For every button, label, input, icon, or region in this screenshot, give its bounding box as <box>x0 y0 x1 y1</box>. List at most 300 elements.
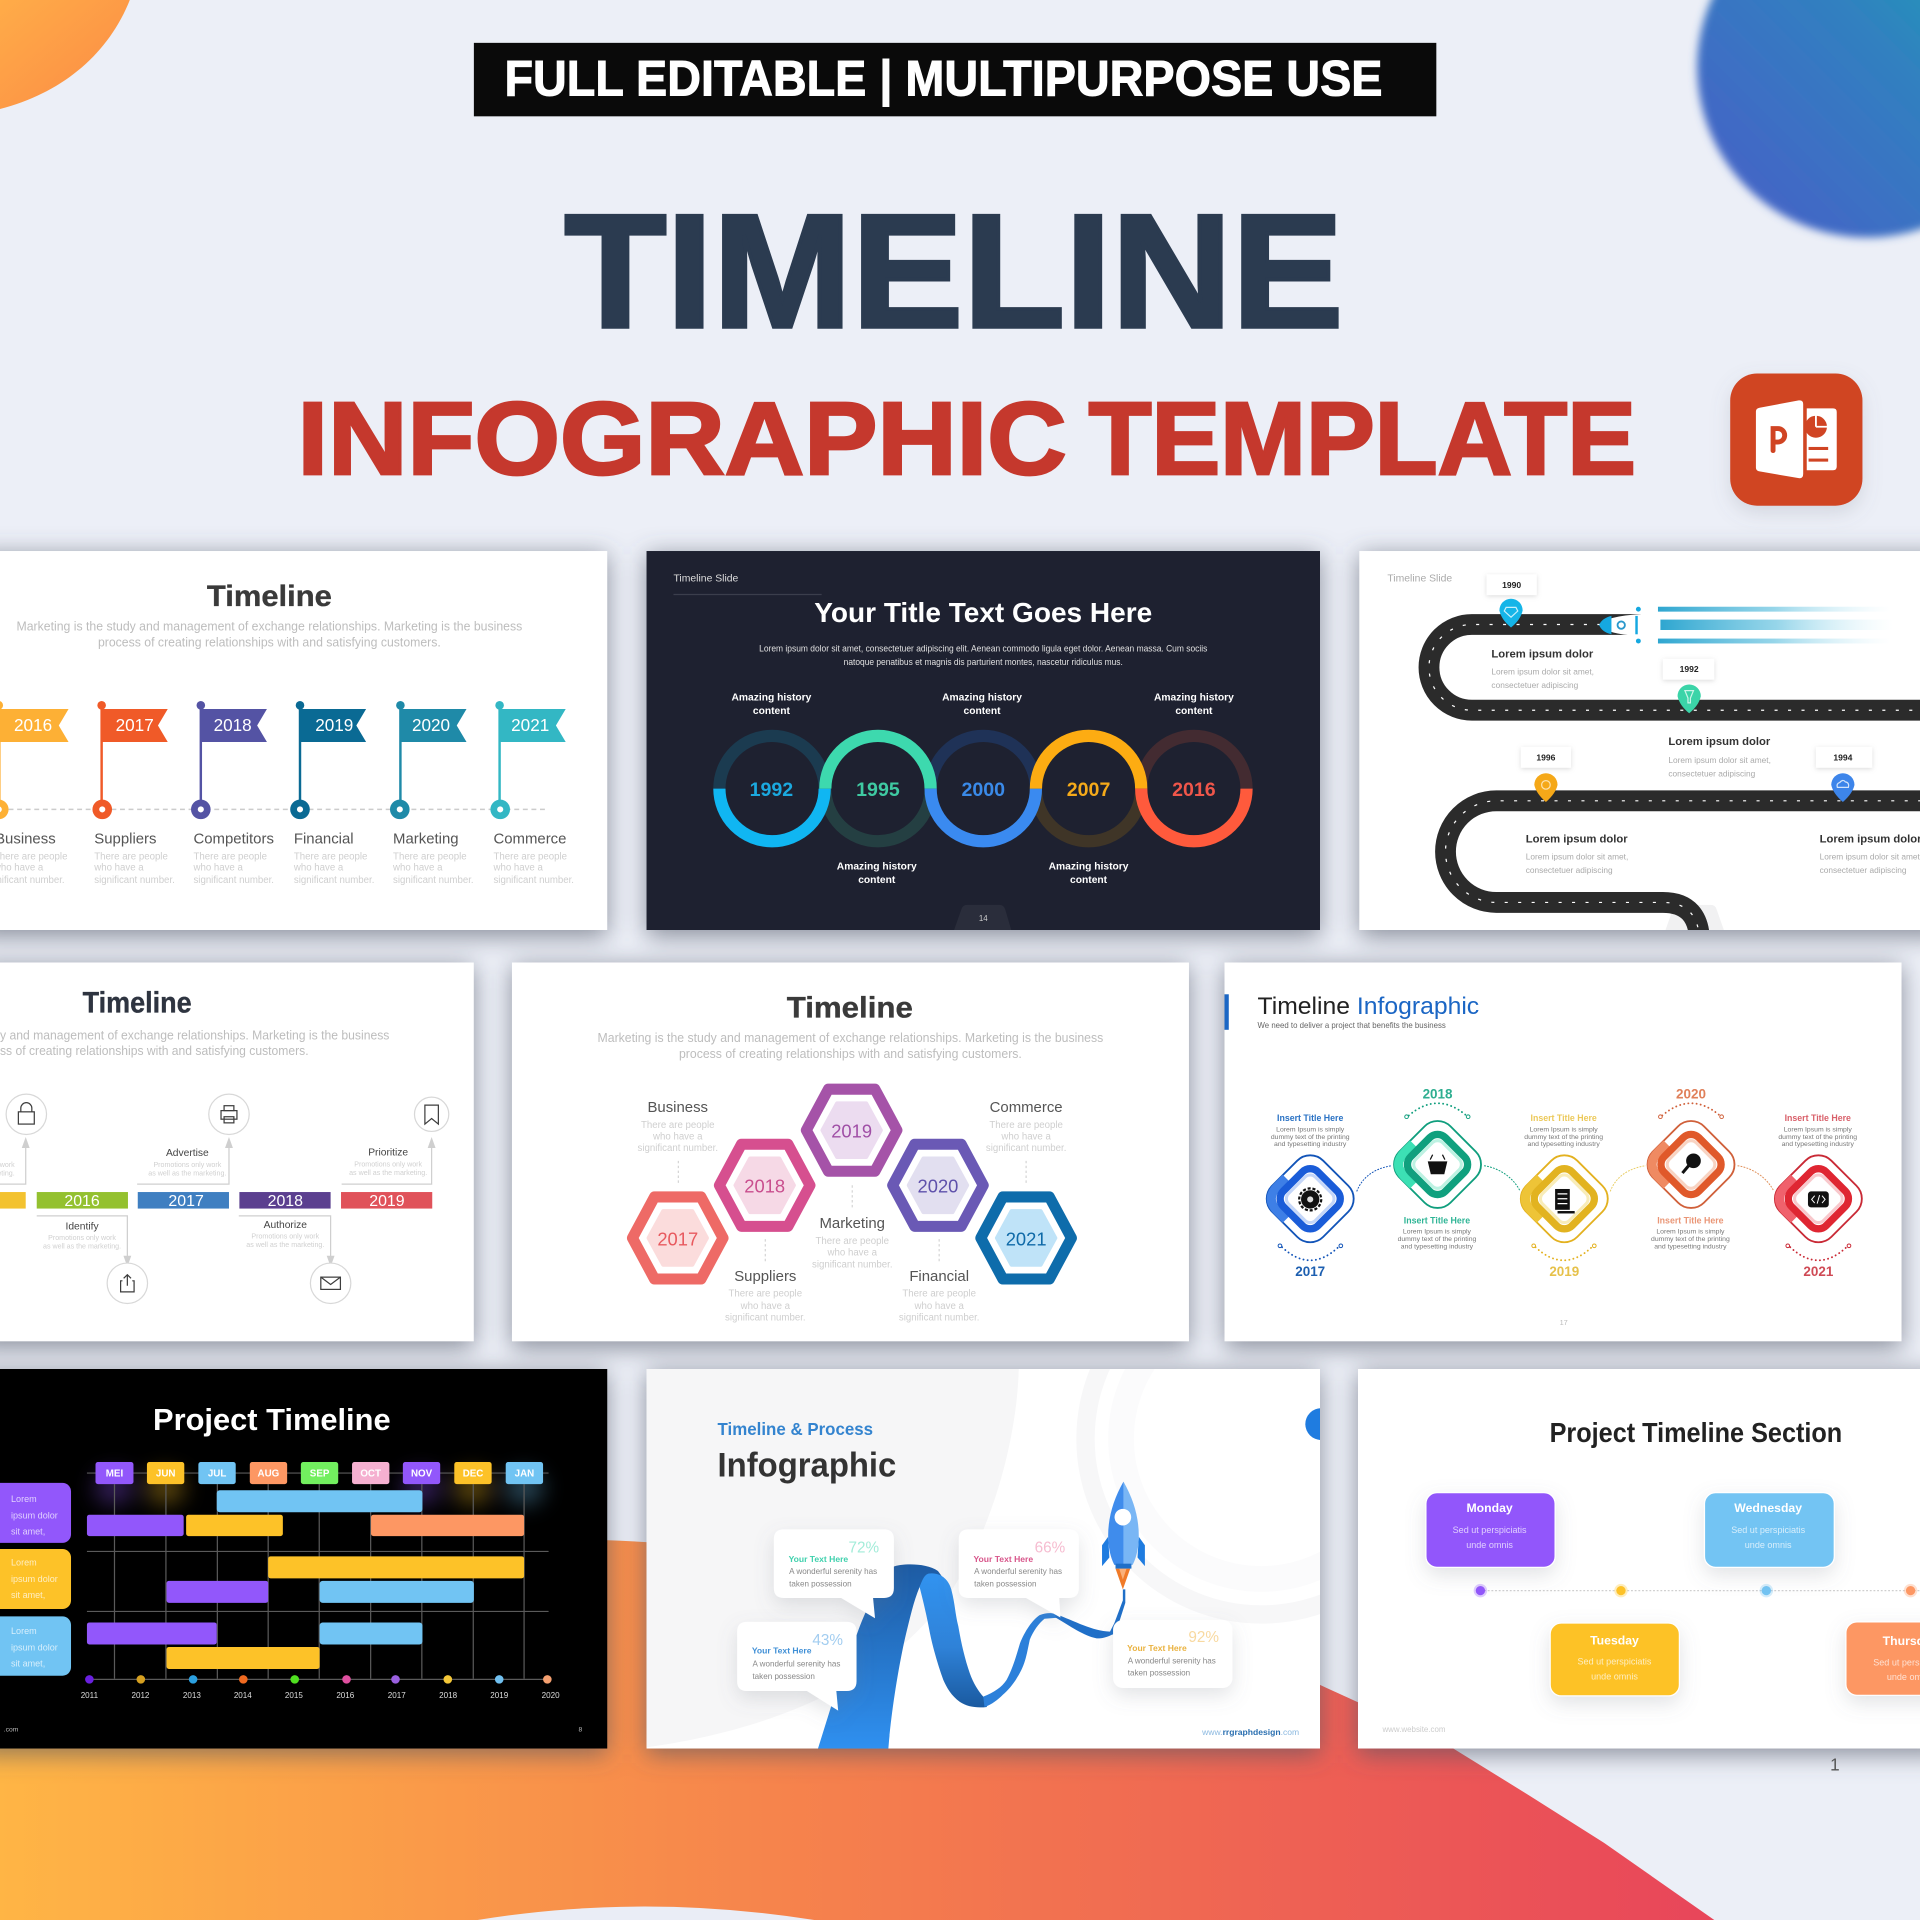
year bars: 2016 <box>64 1193 100 1210</box>
ring captions <box>731 692 1234 886</box>
flag 2018: There are people <box>193 852 267 863</box>
diamond 2018 <box>1386 1086 1489 1216</box>
footer <box>4 1726 583 1733</box>
label: marketing <box>812 1215 893 1270</box>
panel: diamond timeline <box>1224 962 1902 1341</box>
caption 2019: and typesetting industry <box>1528 1141 1600 1148</box>
page number: 17 <box>1560 1318 1568 1327</box>
hexagon 2019: 2019 <box>831 1121 872 1142</box>
step labels: Promotions only work <box>48 1234 116 1242</box>
caption 2017: Insert Title Here <box>1277 1113 1343 1123</box>
caption 2020: Lorem Ipsum is simply <box>1656 1229 1725 1236</box>
step labels: Advertise <box>166 1148 209 1159</box>
hexagon 2021 <box>981 1197 1071 1279</box>
slide label: Timeline Slide <box>1387 574 1452 585</box>
ring 1995: 1995 <box>856 779 900 801</box>
card: tuesday <box>1550 1623 1679 1696</box>
caption 2019: dummy text of the printing <box>1524 1134 1603 1141</box>
diamond 2018: 2018 <box>1423 1086 1453 1101</box>
hexagon 2021: 2021 <box>1006 1228 1047 1249</box>
caption 2021: Insert Title Here <box>1785 1113 1851 1123</box>
step labels: Promotions only work <box>354 1160 423 1168</box>
year bars: 2018 <box>268 1193 303 1210</box>
step labels: Identify <box>65 1221 99 1232</box>
label: marketing: Marketing <box>819 1215 885 1232</box>
label: financial: Financial <box>909 1268 969 1285</box>
callout 92% <box>1113 1620 1232 1688</box>
ring captions: content <box>964 706 1001 717</box>
heading: Timeline & Process <box>718 1419 873 1439</box>
month chips: JAN <box>515 1469 534 1480</box>
icon: lock <box>6 1094 47 1134</box>
card: thursday <box>1846 1622 1920 1695</box>
card: tuesday: Sed ut perspiciatis <box>1578 1657 1652 1667</box>
month chips: OCT <box>360 1469 381 1480</box>
card: monday <box>1426 1493 1555 1567</box>
card: wednesday: Wednesday <box>1734 1501 1802 1515</box>
hexagon 2018: 2018 <box>744 1176 785 1197</box>
flag 2016 <box>0 701 69 886</box>
milestone 1996 <box>1521 747 1571 802</box>
panel: dark rings timeline <box>647 551 1320 931</box>
panel: project timeline section <box>1358 1369 1920 1749</box>
milestone 1992: 1992 <box>1680 664 1699 674</box>
callout 92%: A wonderful serenity has <box>1128 1656 1216 1665</box>
bottom gradient wave <box>0 1535 1714 1920</box>
intro text: y and management of exchange relationships. Marketing is the business <box>0 1028 389 1043</box>
text block 4: Lorem ipsum dolor <box>1820 833 1920 845</box>
footer: .com <box>4 1726 19 1733</box>
gantt bars <box>87 1490 524 1669</box>
caption 2020 <box>1651 1215 1730 1250</box>
footer: www.website.com <box>1381 1725 1446 1734</box>
text block 1: Lorem ipsum dolor sit amet, <box>1491 667 1594 677</box>
ring 1992: 1992 <box>750 779 793 801</box>
label: marketing: significant number. <box>812 1259 893 1270</box>
panel: project timeline gantt <box>0 1369 607 1749</box>
background shapes <box>647 1254 1446 1747</box>
step labels: as well as the marketing. <box>43 1242 121 1250</box>
label: business: There are people <box>641 1120 715 1131</box>
step labels: Promotions only work <box>251 1233 320 1241</box>
flag 2018: who have a <box>192 863 243 874</box>
flag 2017: There are people <box>94 852 168 863</box>
page tab: 14 <box>979 914 988 923</box>
intro text: process of creating relationships with and satisfying customers. <box>98 635 441 650</box>
milestone 1990: 1990 <box>1502 580 1521 590</box>
row label 1: sit amet, <box>11 1527 45 1537</box>
callout 66%: 66% <box>1035 1540 1066 1557</box>
year bars <box>0 1192 432 1210</box>
milestone 1996: 1996 <box>1536 752 1556 762</box>
caption 2017: and typesetting industry <box>1274 1141 1347 1148</box>
label: commerce: Commerce <box>990 1099 1063 1116</box>
caption 2017: Lorem Ipsum is simply <box>1276 1126 1345 1133</box>
text block 1: Lorem ipsum dolor <box>1491 649 1594 661</box>
label: suppliers <box>725 1268 806 1324</box>
flag 2021: There are people <box>493 852 567 863</box>
chip glows <box>94 1471 544 1505</box>
caption 2018: dummy text of the printing <box>1398 1236 1476 1243</box>
year markers: 2020 <box>542 1691 560 1700</box>
intro text <box>17 619 522 650</box>
ring 2016 <box>1141 779 1247 841</box>
icon: mail <box>310 1263 351 1303</box>
milestone 1994 <box>1816 747 1872 802</box>
row label 2 <box>0 1549 71 1609</box>
label: commerce: significant number. <box>986 1143 1066 1154</box>
label: business <box>637 1099 718 1154</box>
diamond 2019 <box>1513 1148 1615 1279</box>
road 1 <box>1429 624 1920 710</box>
label: suppliers: Suppliers <box>734 1268 796 1285</box>
dotted axis <box>1480 1590 1920 1592</box>
callout 43%: A wonderful serenity has <box>752 1660 840 1669</box>
caption 2017 <box>1271 1113 1350 1148</box>
heading: Project Timeline Section <box>1550 1417 1842 1448</box>
card: wednesday: unde omnis <box>1745 1540 1792 1550</box>
intro text <box>759 643 1208 667</box>
label: marketing: who have a <box>827 1248 878 1259</box>
callout 92%: taken possession <box>1128 1669 1190 1678</box>
caption 2019: Lorem Ipsum is simply <box>1530 1126 1598 1133</box>
milestone 1990 <box>1487 574 1537 628</box>
text block 2: Lorem ipsum dolor sit amet, <box>1668 755 1771 765</box>
slide label: Timeline Slide <box>673 574 739 585</box>
connector arrows <box>0 1139 435 1265</box>
flag 2019: There are people <box>294 852 367 863</box>
row label 2: sit amet, <box>11 1590 45 1600</box>
caption 2021: and typesetting industry <box>1782 1141 1854 1148</box>
ring 2007: 2007 <box>1067 779 1110 801</box>
hexagon 2018 <box>719 1144 810 1226</box>
icon: share <box>107 1263 148 1303</box>
accent bar <box>1224 994 1229 1030</box>
label: financial <box>899 1268 979 1324</box>
year markers: 2015 <box>285 1691 303 1700</box>
diamond 2021 <box>1767 1148 1869 1279</box>
year markers: 2019 <box>490 1691 509 1700</box>
heading: Timeline <box>207 580 332 613</box>
callout 66%: Your Text Here <box>973 1554 1033 1564</box>
flag 2017 <box>92 701 175 886</box>
intro text: Marketing is the study and management of exchange relationships. Marketing is the business <box>598 1030 1103 1045</box>
caption 2021 <box>1778 1113 1857 1148</box>
flag 2020: There are people <box>393 852 467 863</box>
ring captions: Amazing history <box>1154 692 1234 703</box>
ring captions: Amazing history <box>837 861 917 872</box>
label: commerce <box>986 1099 1066 1154</box>
ring captions: content <box>1175 706 1213 717</box>
callout 92%: Your Text Here <box>1127 1643 1187 1653</box>
callout 72%: taken possession <box>789 1579 852 1588</box>
label: financial: who have a <box>913 1301 965 1312</box>
step labels: Authorize <box>264 1220 307 1231</box>
caption 2021: Lorem Ipsum is simply <box>1784 1126 1852 1133</box>
flag 2018: 2018 <box>214 715 252 735</box>
label: suppliers: There are people <box>729 1289 802 1300</box>
row label 3 <box>0 1616 71 1676</box>
diamond 2020: 2020 <box>1676 1086 1706 1101</box>
subtitle: infographic template <box>298 381 1636 496</box>
label: business: significant number. <box>637 1143 718 1154</box>
card: monday: Sed ut perspiciatis <box>1453 1525 1527 1535</box>
flag 2021 <box>490 701 574 886</box>
panel: rocket infographic <box>647 1254 1446 1749</box>
page tab <box>1665 905 1724 931</box>
label: financial: significant number. <box>899 1313 979 1324</box>
diamond 2017 <box>1259 1148 1361 1279</box>
milestone 1992 <box>1663 659 1714 713</box>
row label 3: sit amet, <box>11 1659 45 1669</box>
callout 72%: 72% <box>849 1540 880 1557</box>
label: commerce: There are people <box>989 1120 1063 1131</box>
step labels: as well as the marketing. <box>246 1241 324 1249</box>
heading: Timeline Infographic <box>1258 993 1479 1020</box>
step labels: as well as the marketing. <box>148 1170 226 1178</box>
flag 2019 <box>290 701 374 886</box>
heading <box>718 1419 896 1485</box>
ring 2016: 2016 <box>1172 779 1216 801</box>
text block 3: Lorem ipsum dolor <box>1526 833 1628 845</box>
heading: Timeline <box>787 992 913 1025</box>
row label 2: Lorem <box>11 1558 37 1568</box>
flag 2018: significant number. <box>193 875 274 886</box>
month chips: MEI <box>106 1469 123 1480</box>
panel: hexagon timeline <box>512 962 1189 1341</box>
year markers: 2013 <box>183 1691 201 1700</box>
hexagon 2017 <box>632 1197 723 1279</box>
month chips <box>96 1462 543 1484</box>
intro text: ss of creating relationships with and satisfying customers. <box>0 1043 309 1058</box>
dashed connectors <box>678 1161 1026 1264</box>
year markers: 2016 <box>336 1691 355 1700</box>
flag 2017: significant number. <box>94 875 175 886</box>
callout 43%: taken possession <box>752 1672 815 1681</box>
callout 72%: A wonderful serenity has <box>789 1567 877 1576</box>
hexagon 2020: 2020 <box>918 1176 958 1197</box>
callout 43% <box>737 1622 857 1711</box>
flag 2021: Commerce <box>493 831 566 848</box>
heading: Project Timeline <box>153 1403 391 1437</box>
card: wednesday: Sed ut perspiciatis <box>1731 1525 1806 1535</box>
flag 2021: significant number. <box>493 875 574 886</box>
label: suppliers: significant number. <box>725 1313 806 1324</box>
page number: 1 <box>1830 1755 1840 1775</box>
website credit: www.rrgraphdesign.com <box>1201 1727 1299 1737</box>
year bars: 2017 <box>168 1193 204 1210</box>
text block 3: Lorem ipsum dolor sit amet, <box>1526 852 1628 862</box>
caption 2018: Lorem Ipsum is simply <box>1403 1229 1472 1236</box>
text block 2: Lorem ipsum dolor <box>1668 736 1771 748</box>
callout 72%: Your Text Here <box>789 1554 848 1564</box>
month chips: JUL <box>208 1469 226 1480</box>
ring 2000: 2000 <box>961 779 1005 801</box>
text block 1 <box>1491 649 1594 690</box>
subtitle: infographic template: TEMPLATE <box>1089 381 1636 496</box>
panel: road timeline <box>1359 551 1920 943</box>
page tab <box>954 905 1011 931</box>
callout 43%: 43% <box>812 1632 843 1649</box>
caption 2019: Insert Title Here <box>1531 1113 1597 1123</box>
intro text <box>0 1028 389 1058</box>
month chips: JUN <box>156 1469 175 1480</box>
panel: flag timeline <box>0 551 607 930</box>
step labels: Promotions only work <box>153 1161 222 1169</box>
road 2 <box>1446 801 1920 943</box>
ring captions: Amazing history <box>731 692 812 703</box>
ring captions: Amazing history <box>1049 861 1129 872</box>
caption 2017: dummy text of the printing <box>1271 1134 1350 1141</box>
flag 2020 <box>390 701 474 886</box>
callout 66%: taken possession <box>974 1579 1037 1588</box>
ring 2007 <box>1036 736 1141 801</box>
month chips: DEC <box>463 1469 483 1480</box>
ring tracks <box>719 736 1247 841</box>
year markers: 2014 <box>234 1691 252 1700</box>
year markers: 2012 <box>131 1691 150 1700</box>
subtitle: infographic template: INFOGRAPHIC <box>298 381 1067 496</box>
heading: Your Title Text Goes Here <box>814 597 1152 628</box>
milestone 1994: 1994 <box>1833 752 1853 762</box>
flag 2021: 2021 <box>511 715 549 735</box>
text block 1: consectetuer adipiscing <box>1491 680 1579 690</box>
subheading: We need to deliver a project that benefits the business <box>1258 1021 1446 1030</box>
intro text: Lorem ipsum dolor sit amet, consectetuer adipiscing elit. Aenean commodo ligula eget dolor. Aenean massa. Cum sociis <box>759 643 1208 653</box>
flag 2020: 2020 <box>412 715 450 735</box>
panel: icon timeline <box>0 962 474 1341</box>
text block 3: consectetuer adipiscing <box>1526 865 1613 875</box>
callout 43%: Your Text Here <box>752 1646 812 1656</box>
flag 2020: Marketing <box>393 831 459 848</box>
text block 4: consectetuer adipiscing <box>1820 865 1907 875</box>
flag 2019: 2019 <box>315 715 353 735</box>
callout 92%: 92% <box>1188 1629 1219 1646</box>
row label 3: Lorem <box>11 1626 37 1636</box>
ring captions: content <box>858 875 896 886</box>
flag 2020: who have a <box>392 863 443 874</box>
dashed axis <box>0 808 546 810</box>
caption 2020: and typesetting industry <box>1654 1243 1727 1250</box>
text block 4 <box>1820 833 1920 875</box>
card: monday: unde omnis <box>1466 1540 1513 1550</box>
flag 2017: Suppliers <box>94 831 157 848</box>
heading: Infographic <box>718 1447 896 1485</box>
year markers: 2018 <box>439 1691 458 1700</box>
ring captions: content <box>753 706 791 717</box>
text block 4: Lorem ipsum dolor sit amet, <box>1820 852 1920 862</box>
row label 1: Lorem <box>11 1494 37 1504</box>
ring captions: content <box>1070 875 1108 886</box>
year markers <box>81 1675 560 1700</box>
diamond 2021: 2021 <box>1803 1264 1834 1279</box>
rocket <box>1102 1482 1145 1589</box>
flag 2017: 2017 <box>116 715 154 735</box>
hexagon 2019 <box>806 1089 897 1171</box>
axis dots <box>1474 1584 1917 1597</box>
step labels: as well as the marketing. <box>349 1169 427 1177</box>
flag 2020: significant number. <box>393 875 474 886</box>
card: wednesday <box>1704 1493 1834 1567</box>
row label 1 <box>0 1483 71 1543</box>
intro text: natoque penatibus et magnis dis parturient montes, nascetur ridiculus mus. <box>844 657 1123 667</box>
card: tuesday: unde omnis <box>1591 1671 1638 1681</box>
month chips: NOV <box>411 1469 433 1480</box>
label: commerce: who have a <box>1000 1131 1051 1142</box>
year markers: 2017 <box>388 1691 406 1700</box>
rocket with trails <box>1599 607 1893 643</box>
caption 2021: dummy text of the printing <box>1778 1134 1857 1141</box>
connector arcs <box>1357 1166 1774 1191</box>
hexagon 2017: 2017 <box>657 1228 698 1249</box>
year bars: 2019 <box>369 1193 405 1210</box>
icon: powerpoint <box>1730 373 1862 506</box>
caption 2020: dummy text of the printing <box>1651 1236 1730 1243</box>
flag 2021: who have a <box>492 863 543 874</box>
flag 2018: Competitors <box>193 831 274 848</box>
flag 2019: Financial <box>294 831 354 848</box>
intro text: Marketing is the study and management of exchange relationships. Marketing is the business <box>17 619 522 634</box>
year markers: 2011 <box>81 1691 99 1700</box>
ring 2000 <box>931 779 1036 841</box>
diamond 2020 <box>1640 1086 1742 1216</box>
ring 1992 <box>719 779 825 841</box>
intro text <box>598 1030 1103 1061</box>
row label 3: ipsum dolor <box>11 1643 58 1653</box>
ring captions: Amazing history <box>942 692 1022 703</box>
label: business: Business <box>647 1099 708 1116</box>
caption 2020: Insert Title Here <box>1657 1215 1724 1225</box>
icon: printer <box>209 1094 249 1134</box>
decorative orange corner shape <box>0 0 130 109</box>
step labels: Prioritize <box>368 1147 408 1158</box>
ribbon <box>818 1564 1125 1749</box>
label: business: who have a <box>652 1131 703 1142</box>
label: marketing: There are people <box>815 1236 889 1247</box>
caption 2018: Insert Title Here <box>1404 1215 1470 1225</box>
intro text: process of creating relationships with and satisfying customers. <box>679 1046 1022 1061</box>
label: suppliers: who have a <box>740 1301 791 1312</box>
flag 2019: who have a <box>293 863 344 874</box>
panel shadows <box>0 555 1920 1755</box>
step labels <box>0 1147 427 1250</box>
diamond 2019: 2019 <box>1549 1264 1579 1279</box>
month chips: AUG <box>258 1469 279 1480</box>
grid <box>87 1473 549 1679</box>
card: monday: Monday <box>1466 1501 1513 1515</box>
diamond 2017: 2017 <box>1295 1264 1325 1279</box>
flag 2016: 2016 <box>14 715 52 735</box>
caption 2018 <box>1398 1215 1476 1250</box>
icon: bookmark <box>414 1097 449 1131</box>
flag 2017: who have a <box>93 863 144 874</box>
row label 2: ipsum dolor <box>11 1574 58 1584</box>
hexagon 2020 <box>893 1144 983 1226</box>
text block 2 <box>1668 736 1771 778</box>
callout 66% <box>959 1529 1079 1618</box>
flag 2018 <box>191 701 274 886</box>
callout 66%: A wonderful serenity has <box>974 1567 1062 1576</box>
ring 1995 <box>825 736 931 801</box>
callout 72% <box>774 1529 894 1618</box>
bottom white arc <box>478 1907 814 1920</box>
card: tuesday: Tuesday <box>1590 1633 1639 1647</box>
label: financial: There are people <box>902 1289 976 1300</box>
caption 2019 <box>1524 1113 1603 1148</box>
footer: 8 <box>579 1726 583 1733</box>
decorative blue circle <box>1697 0 1920 238</box>
text block 3 <box>1526 833 1628 875</box>
